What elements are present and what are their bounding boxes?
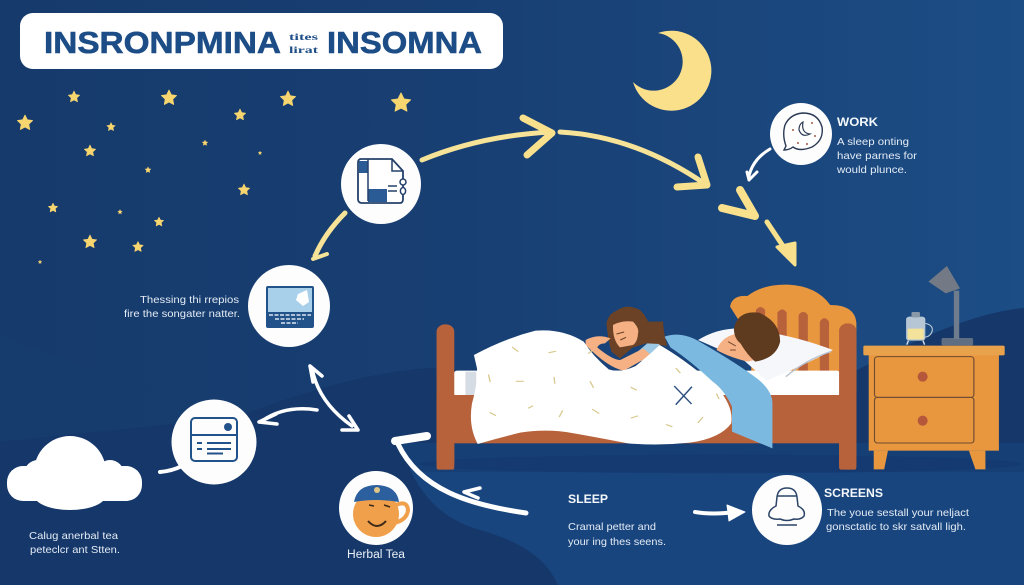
headboard <box>730 285 856 393</box>
title banner: tites <box>289 32 319 42</box>
text: cloud note <box>29 530 120 556</box>
text: screens: The youe sestall your neljact <box>827 507 969 519</box>
man sleeping <box>717 312 780 362</box>
white duvet <box>471 330 732 445</box>
title banner: lirat <box>289 45 318 55</box>
arrow: to card icon <box>259 409 317 424</box>
floor shadow <box>420 455 1021 473</box>
arrow: laptop to sleeper <box>310 366 358 430</box>
label: herbal tea: Herbal Tea <box>347 549 406 561</box>
icon: herbal tea jar <box>906 312 932 345</box>
icon: cloud <box>7 436 142 510</box>
text: laptop note <box>124 294 240 320</box>
title banner <box>20 13 503 69</box>
icon: laptop circle <box>248 265 330 347</box>
bed scene <box>420 266 1021 473</box>
nightstand <box>863 346 1005 469</box>
stars <box>17 90 411 264</box>
pillow <box>698 328 833 381</box>
text: sleep: your ing thes seens. <box>568 536 666 548</box>
icon: screens circle <box>752 475 822 545</box>
arrow: work to bed <box>747 149 770 180</box>
title banner: INSRONPMINA <box>44 25 281 60</box>
icon: herbal tea cup circle <box>339 471 413 545</box>
icon: document circle <box>341 144 421 224</box>
text: laptop note: fire the songater natter. <box>124 308 240 320</box>
text: laptop note: Thessing thi rrepios <box>140 294 239 306</box>
text: screens: SCREENS <box>824 486 883 500</box>
text: sleep: Cramal petter and <box>568 521 656 533</box>
icon: desk lamp <box>928 266 973 345</box>
icon: work circle <box>770 103 832 165</box>
yellow cycle arrows <box>313 118 795 265</box>
woman lying awake <box>586 307 667 371</box>
icon: crescent moon <box>633 31 711 111</box>
text: work: have parnes for <box>837 150 918 162</box>
blue blanket <box>665 335 772 448</box>
text: work: WORK <box>837 115 878 129</box>
text: screens <box>824 486 969 533</box>
text: work <box>836 115 918 176</box>
icon: card circle <box>172 400 256 484</box>
text: work: would plunce. <box>836 164 907 176</box>
mattress <box>454 371 840 396</box>
bed frame <box>437 323 856 470</box>
title banner: INSOMNA <box>327 25 482 60</box>
arrow: sleep to herbal tea <box>395 436 526 513</box>
arrow: sleep to screens <box>695 505 745 521</box>
white flow arrows <box>160 149 770 521</box>
text: cloud note: Calug anerbal tea <box>29 530 118 542</box>
text: work: A sleep onting <box>837 136 909 148</box>
arrow: cloud to card <box>160 466 182 472</box>
text: sleep: SLEEP <box>568 492 608 506</box>
text: sleep <box>568 492 666 548</box>
text: screens: gonsctatic to skr satvall ligh. <box>826 521 966 533</box>
text: cloud note: peteclcr ant Stten. <box>30 544 120 556</box>
